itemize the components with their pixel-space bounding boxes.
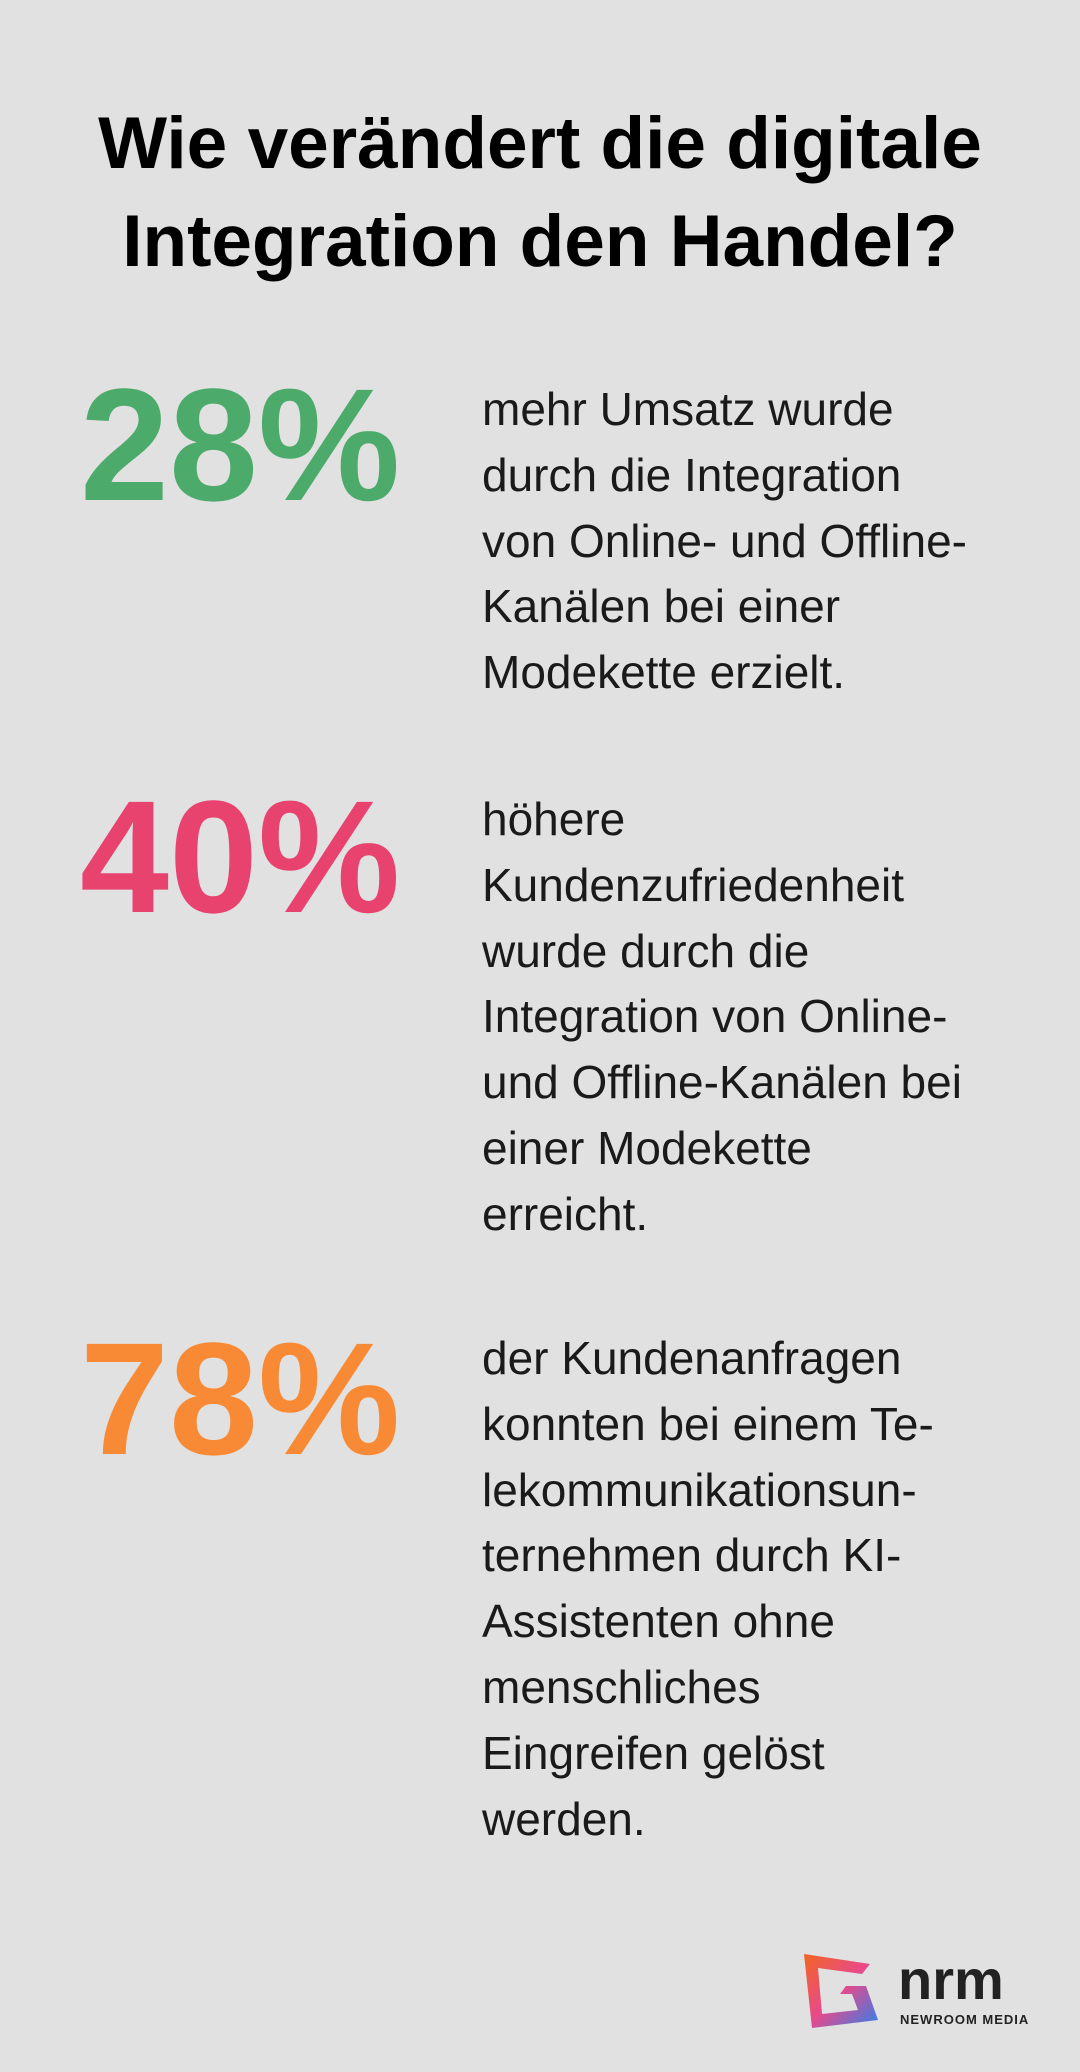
stat 3 text: ternehmen durch KI- bbox=[482, 1529, 901, 1581]
stat 1 text bbox=[482, 383, 967, 698]
stat 2 text: einer Modekette bbox=[482, 1122, 812, 1174]
brand name: nrm bbox=[898, 1948, 1004, 2011]
stat 3 text: menschliches bbox=[482, 1661, 761, 1713]
stat 3 text: Eingreifen gelöst bbox=[482, 1727, 825, 1779]
logo bbox=[804, 1948, 1029, 2028]
stat 3 text: lekommunikationsun- bbox=[482, 1464, 917, 1516]
stat 3 text: konnten bei einem Te- bbox=[482, 1398, 934, 1450]
title: Integration den Handel? bbox=[122, 201, 958, 282]
stat 1 text: von Online- und Offline- bbox=[482, 515, 967, 567]
brand subtitle: NEWROOM MEDIA bbox=[900, 2012, 1029, 2027]
stat 3 text: der Kundenanfragen bbox=[482, 1332, 901, 1384]
stat 1 text: durch die Integration bbox=[482, 449, 901, 501]
stat 3 text bbox=[482, 1332, 934, 1845]
title bbox=[98, 103, 982, 282]
stat 2 text: und Offline-Kanälen bei bbox=[482, 1056, 962, 1108]
stat 2 text: höhere bbox=[482, 793, 625, 845]
stat 1 text: mehr Umsatz wurde bbox=[482, 383, 894, 435]
title: Wie verändert die digitale bbox=[98, 103, 982, 184]
stat 2 text: erreicht. bbox=[482, 1188, 648, 1240]
icon: logo mark bbox=[804, 1954, 878, 2028]
stat 2 text bbox=[482, 793, 962, 1240]
stat 3 number: 78% bbox=[80, 1309, 400, 1488]
stat 1 text: Kanälen bei einer bbox=[482, 580, 840, 632]
stat 1 number: 28% bbox=[80, 355, 400, 534]
stat 2 text: wurde durch die bbox=[482, 925, 809, 977]
stat 2 text: Integration von Online- bbox=[482, 990, 947, 1042]
stat 2 text: Kundenzufriedenheit bbox=[482, 859, 904, 911]
stat 1 text: Modekette erzielt. bbox=[482, 646, 845, 698]
stat 3 text: Assistenten ohne bbox=[482, 1595, 835, 1647]
stat 2 number: 40% bbox=[80, 767, 400, 946]
stat 3 text: werden. bbox=[482, 1793, 646, 1845]
